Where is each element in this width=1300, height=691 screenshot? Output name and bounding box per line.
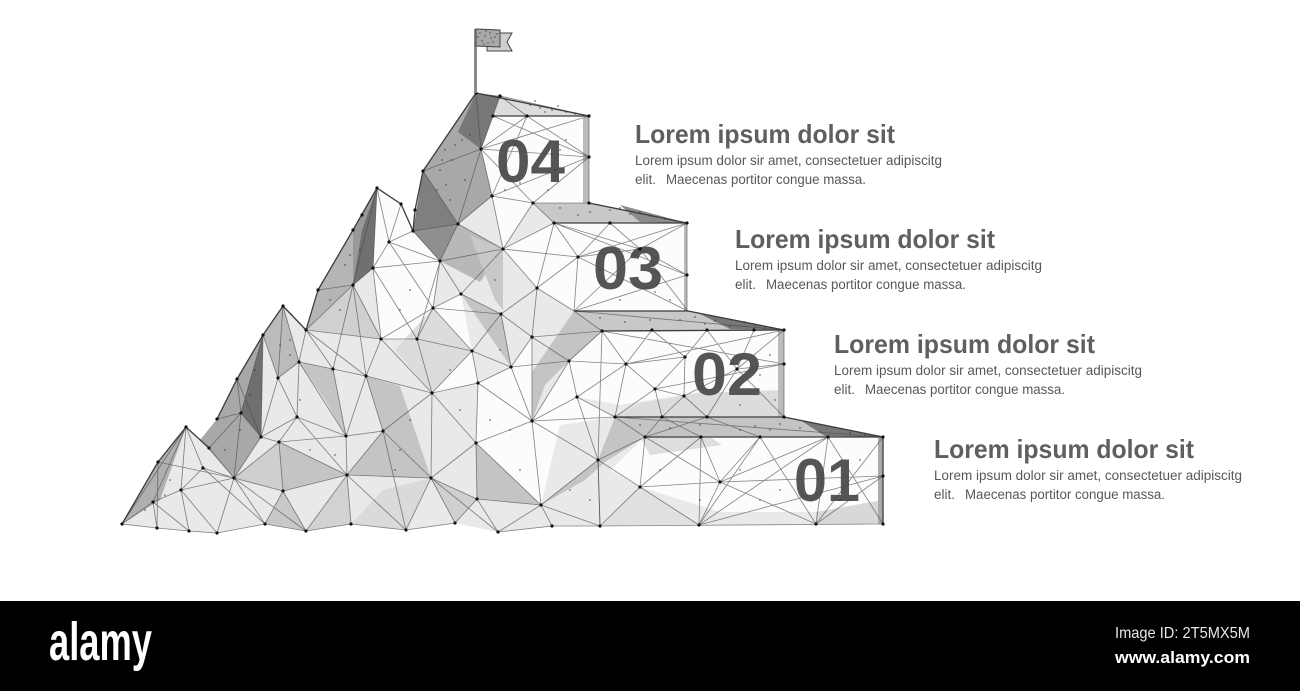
text block 03: Lorem ipsum dolor sir amet, consectetuer adipiscitg [735, 258, 1042, 273]
text block 04: Lorem ipsum dolor sit [635, 119, 895, 149]
step top surfaces [493, 96, 883, 524]
flag speckles [478, 31, 497, 44]
step number 02: 02 [692, 341, 762, 408]
text block 01: Lorem ipsum dolor sir amet, consectetuer adipiscitg [934, 468, 1242, 483]
alamy logo: alamy [49, 612, 152, 672]
text block 01: Maecenas portitor congue massa. [965, 487, 1165, 502]
text block 03: elit. [735, 277, 756, 292]
flag on summit [474, 29, 512, 93]
mesh lines [122, 188, 440, 533]
flag tail [487, 33, 512, 51]
text block 04: Lorem ipsum dolor sir amet, consectetuer adipiscitg [635, 153, 942, 168]
text block 04: elit. [635, 172, 656, 187]
text block 01: Lorem ipsum dolor sit [934, 434, 1194, 464]
flag cloth [476, 29, 500, 47]
flag pole [474, 29, 477, 93]
text block 03: Maecenas portitor congue massa. [766, 277, 966, 292]
dark facets [122, 93, 500, 524]
text block 01 [934, 434, 1242, 502]
text block 03: Lorem ipsum dolor sit [735, 224, 995, 254]
text block 02: elit. [834, 382, 855, 397]
speckle particles [145, 101, 865, 510]
white facets [373, 116, 883, 512]
step number 03: 03 [593, 235, 663, 302]
text block 03 [735, 224, 1042, 292]
mesh nodes [122, 93, 883, 533]
step number 01: 01 [794, 447, 860, 514]
text block 01: elit. [934, 487, 955, 502]
text block 04 [635, 119, 942, 187]
website: www.alamy.com [1114, 648, 1250, 667]
text block 02: Maecenas portitor congue massa. [865, 382, 1065, 397]
mountain facets [122, 93, 883, 533]
text block 02: Lorem ipsum dolor sit [834, 329, 1095, 359]
footer watermark bar [0, 601, 1300, 691]
shaded facets [234, 224, 883, 531]
dark ridge outlines [122, 93, 883, 524]
text block 04: Maecenas portitor congue massa. [666, 172, 866, 187]
text block 02: Lorem ipsum dolor sir amet, consectetuer adipiscitg [834, 363, 1142, 378]
image id: Image ID: 2T5MX5M [1115, 625, 1250, 642]
wireframe mesh overlay [122, 93, 883, 533]
step number 04: 04 [496, 128, 566, 195]
mountain silhouette [122, 93, 883, 533]
text block 02 [834, 329, 1142, 397]
